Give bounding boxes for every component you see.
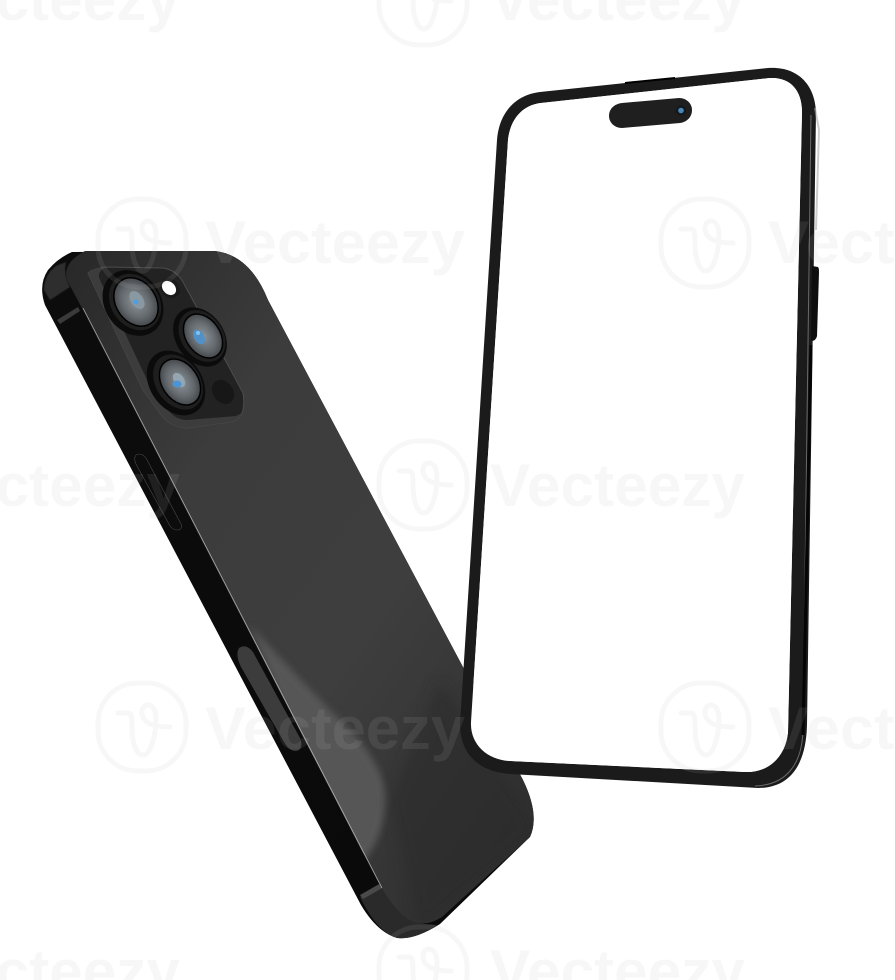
- flash: [156, 274, 184, 302]
- soft reflection on back panel: [254, 632, 534, 859]
- camera plate bevel: [88, 267, 242, 428]
- mute switch: [135, 454, 182, 530]
- watermark text row 2: Vecteezy: [205, 209, 466, 276]
- frame edge highlights: [625, 78, 819, 786]
- phone body and metal side band: [42, 251, 534, 938]
- outer frame with screen cut-out: [460, 68, 816, 788]
- phone: back view: [42, 251, 540, 938]
- watermark text row 4: [205, 695, 895, 762]
- illustration: two floating smartphones: [42, 68, 820, 938]
- back panel: [66, 251, 534, 923]
- lidar sensor: [207, 376, 239, 408]
- thin edge highlight: [83, 308, 382, 888]
- watermark text row 2: [205, 209, 895, 276]
- lens: right: [162, 297, 238, 377]
- lens: top: [90, 258, 176, 348]
- watermark text row 4: Vecteezy: [205, 695, 466, 762]
- side button: [811, 266, 819, 341]
- glossy corner highlights on the band: [44, 262, 437, 938]
- dynamic island: [609, 98, 692, 128]
- watermark text row 1: [0, 0, 746, 33]
- volume button: [237, 646, 301, 751]
- phone: front view: [460, 68, 819, 788]
- front camera: [676, 106, 686, 116]
- watermark text row 5: [0, 938, 746, 980]
- lens: bottom: [135, 339, 217, 427]
- watermark text row 3: [0, 452, 746, 519]
- camera module: [88, 258, 244, 428]
- watermark text row 3: Vecteezy: [490, 452, 746, 519]
- watermark logos: [98, 0, 749, 980]
- screen: [471, 78, 802, 772]
